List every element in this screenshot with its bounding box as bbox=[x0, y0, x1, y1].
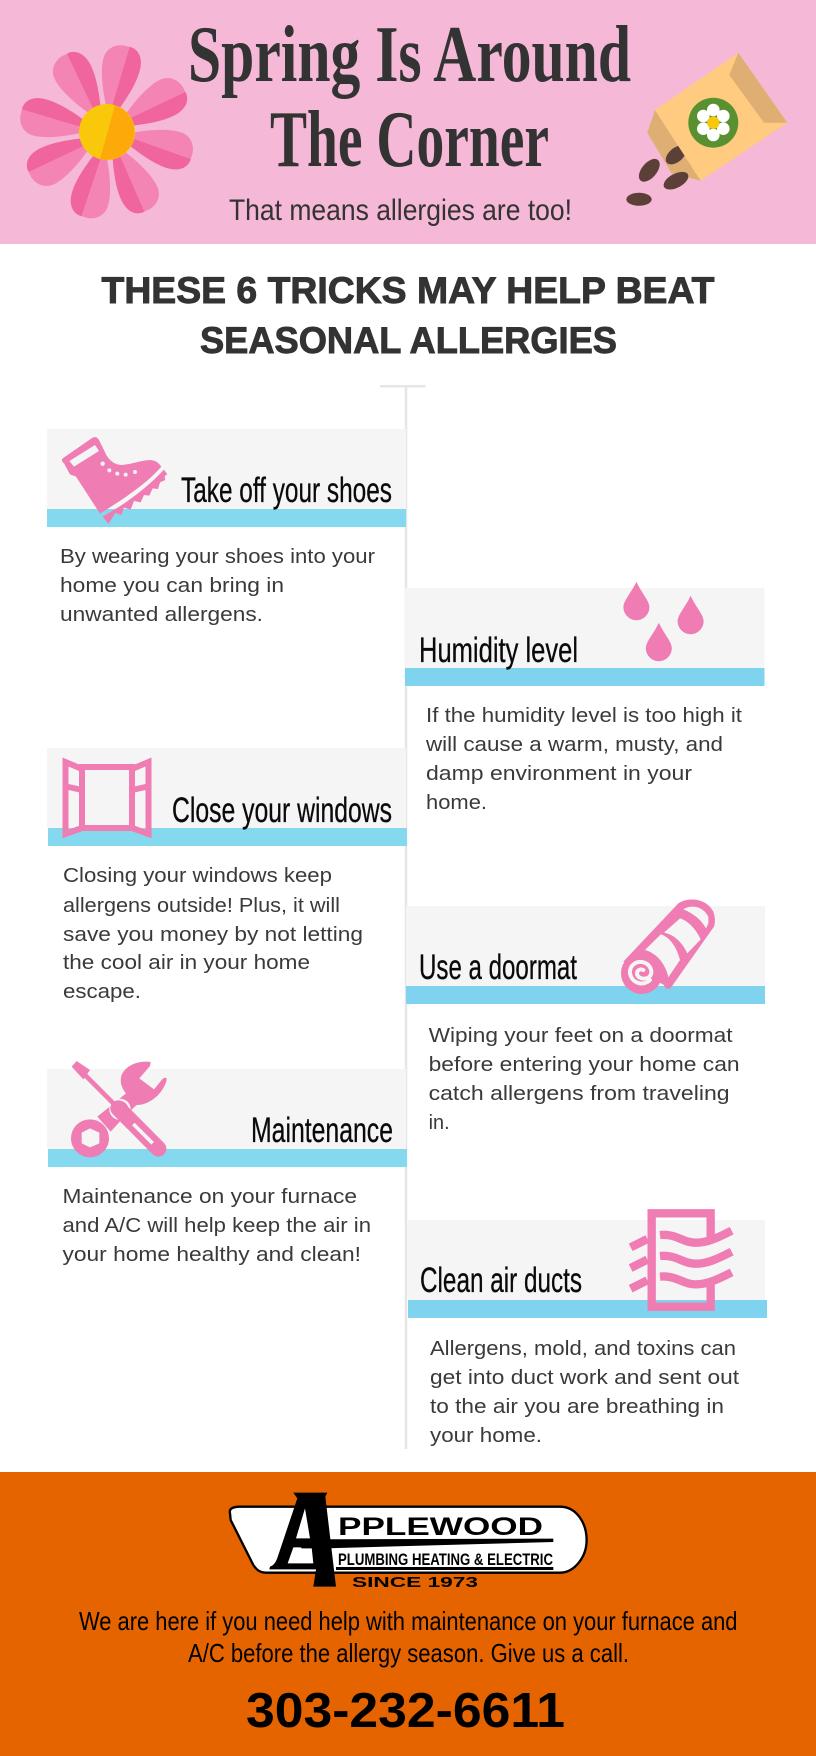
text: windows description: allergens outside! Plus, it will bbox=[63, 894, 340, 917]
text: windows description: the cool air in your home bbox=[63, 951, 310, 974]
panel: maintenance bbox=[47, 1061, 407, 1266]
text: air ducts description: to the air you are breathing in bbox=[430, 1395, 724, 1418]
text: air ducts description: your home. bbox=[430, 1424, 542, 1447]
header panel bbox=[0, 0, 816, 244]
text: humidity description: If the humidity level is too high it bbox=[426, 704, 742, 727]
text: humidity description: will cause a warm, musty, and bbox=[425, 733, 723, 756]
text: doormat description: catch allergens from traveling bbox=[429, 1082, 730, 1105]
text: call to action: A/C before the allergy season. Give us a call. bbox=[188, 1638, 629, 1668]
panel: close your windows bbox=[47, 748, 407, 1003]
subtitle: That means allergies are too! bbox=[229, 194, 572, 227]
timeline line bbox=[380, 385, 426, 1449]
logo: Applewood: PPLEWOOD bbox=[338, 1513, 543, 1541]
icon: water drops bbox=[623, 582, 704, 661]
title: Spring Is Around bbox=[188, 11, 631, 99]
heading: use a doormat: Use a doormat bbox=[419, 948, 577, 987]
text: humidity description: damp environment in your bbox=[426, 762, 692, 785]
heading: close your windows: Close your windows bbox=[172, 791, 392, 830]
text: maintenance description: your home healthy and clean! bbox=[62, 1243, 361, 1266]
icon: window bbox=[64, 762, 150, 834]
icon: air duct bbox=[631, 1213, 732, 1307]
icon: flower bbox=[17, 42, 197, 222]
footer panel bbox=[0, 1472, 816, 1756]
text: humidity description bbox=[425, 704, 742, 814]
text: doormat description: in. bbox=[429, 1111, 450, 1134]
text: shoes description: By wearing your shoes into your bbox=[60, 545, 375, 568]
text: maintenance description: and A/C will help keep the air in bbox=[62, 1214, 371, 1237]
main heading: THESE 6 TRICKS MAY HELP BEAT bbox=[102, 270, 715, 311]
main heading bbox=[102, 270, 715, 361]
text: windows description: save you money by not letting bbox=[63, 923, 363, 946]
text: windows description: Closing your windows keep bbox=[63, 864, 332, 887]
logo: Applewood: PLUMBING HEATING & ELECTRIC bbox=[338, 1550, 553, 1569]
text: air ducts description bbox=[430, 1337, 739, 1447]
panel: take off your shoes bbox=[47, 429, 406, 626]
text: windows description bbox=[63, 864, 363, 1003]
icon: seed packet bbox=[626, 53, 787, 206]
text: shoes description: home you can bring in bbox=[60, 574, 284, 597]
logo: Applewood bbox=[230, 1493, 587, 1591]
title bbox=[188, 11, 631, 184]
icon: boot bbox=[62, 437, 167, 524]
text: air ducts description: Allergens, mold, and toxins can bbox=[430, 1337, 736, 1360]
text: shoes description bbox=[60, 545, 375, 626]
panel: humidity level bbox=[405, 582, 764, 814]
panel: use a doormat bbox=[406, 900, 765, 1134]
text: doormat description bbox=[429, 1024, 740, 1134]
heading: take off your shoes: Take off your shoes bbox=[181, 471, 392, 510]
text: doormat description: Wiping your feet on a doormat bbox=[429, 1024, 733, 1047]
title: The Corner bbox=[270, 96, 549, 184]
heading: humidity level: Humidity level bbox=[419, 631, 578, 670]
panel: clean air ducts bbox=[407, 1213, 767, 1447]
text: air ducts description: get into duct work and sent out bbox=[430, 1366, 739, 1389]
text: call to action bbox=[79, 1606, 738, 1668]
icon: wrench and screwdriver bbox=[71, 1061, 167, 1157]
text: humidity description: home. bbox=[426, 791, 487, 814]
text: windows description: escape. bbox=[63, 980, 141, 1003]
text: doormat description: before entering your home can bbox=[429, 1053, 740, 1076]
heading: maintenance: Maintenance bbox=[251, 1111, 393, 1150]
phone number: 303-232-6611 bbox=[246, 1684, 565, 1738]
icon: rolled doormat bbox=[621, 900, 715, 994]
logo: Applewood: SINCE 1973 bbox=[352, 1574, 478, 1591]
text: maintenance description bbox=[62, 1185, 371, 1266]
main heading: SEASONAL ALLERGIES bbox=[200, 320, 617, 361]
text: shoes description: unwanted allergens. bbox=[60, 603, 263, 626]
text: maintenance description: Maintenance on your furnace bbox=[62, 1185, 357, 1208]
heading: clean air ducts: Clean air ducts bbox=[420, 1261, 582, 1300]
